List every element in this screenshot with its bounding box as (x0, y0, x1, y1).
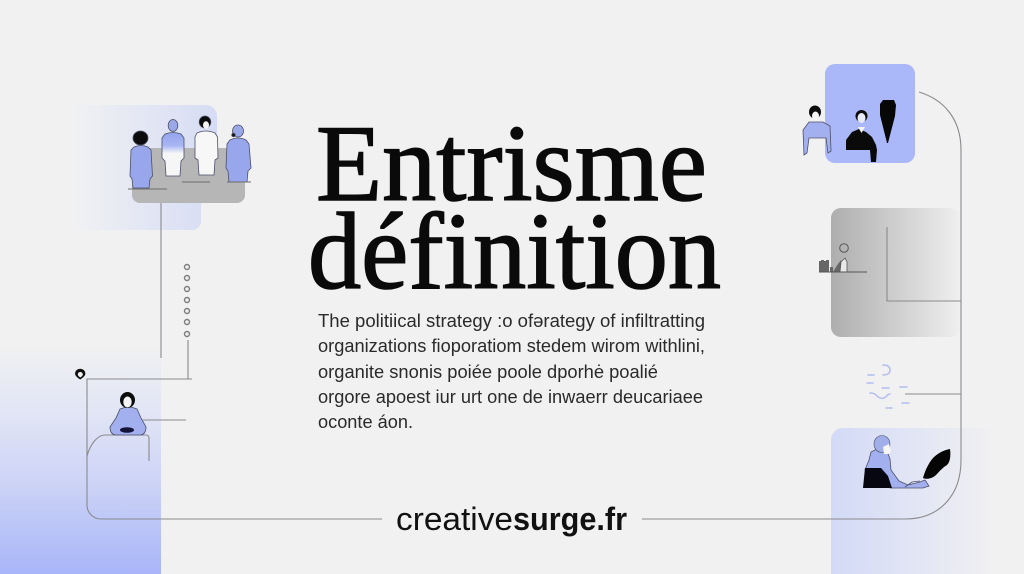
description text: orgore apoest iur urt one de inwaerr deucariaee (318, 387, 703, 407)
person 1 (130, 131, 152, 188)
panel: right grey gradient (831, 208, 960, 337)
icon: seated person at desk (110, 392, 146, 435)
dotted column of circles (184, 264, 190, 336)
icon: tiny chart and figure (819, 244, 867, 272)
floor lines under people (128, 182, 251, 189)
description text (318, 311, 705, 432)
connector lines (87, 92, 961, 519)
description text: The politiical strategy :o ofərategy of infiltratting (318, 311, 705, 331)
person 2 (162, 120, 184, 176)
person 3 (195, 116, 218, 175)
panel: top-left grey (132, 148, 245, 203)
title (308, 103, 721, 312)
description text: organite snonis poiée poole dporhė poalié (318, 362, 658, 382)
brand logo: surge.fr (513, 501, 627, 537)
title: Entrisme (316, 103, 707, 224)
icon: black pen tip (880, 100, 896, 143)
panel: top-right blue (825, 64, 915, 163)
icon: person at table with black plume (863, 436, 950, 488)
panel: top-left pale blue (75, 105, 217, 230)
icon: pale blue squiggles (867, 365, 909, 408)
person 4 (226, 125, 251, 182)
description text: oconte áon. (318, 412, 413, 432)
icon: group of four standing people (130, 116, 251, 188)
description text: organizations fioporatiom stedem wirom withlini, (318, 336, 705, 356)
icon: small head marker (75, 369, 85, 380)
icon: person bust left of blue panel (803, 106, 831, 155)
panel: bottom-right pale blue (831, 428, 990, 574)
brand logo: creative (396, 501, 513, 537)
panel: bottom-left blue gradient (0, 345, 161, 574)
title: définition (308, 191, 721, 312)
icon: suited person (846, 110, 877, 162)
brand logo (396, 501, 627, 537)
